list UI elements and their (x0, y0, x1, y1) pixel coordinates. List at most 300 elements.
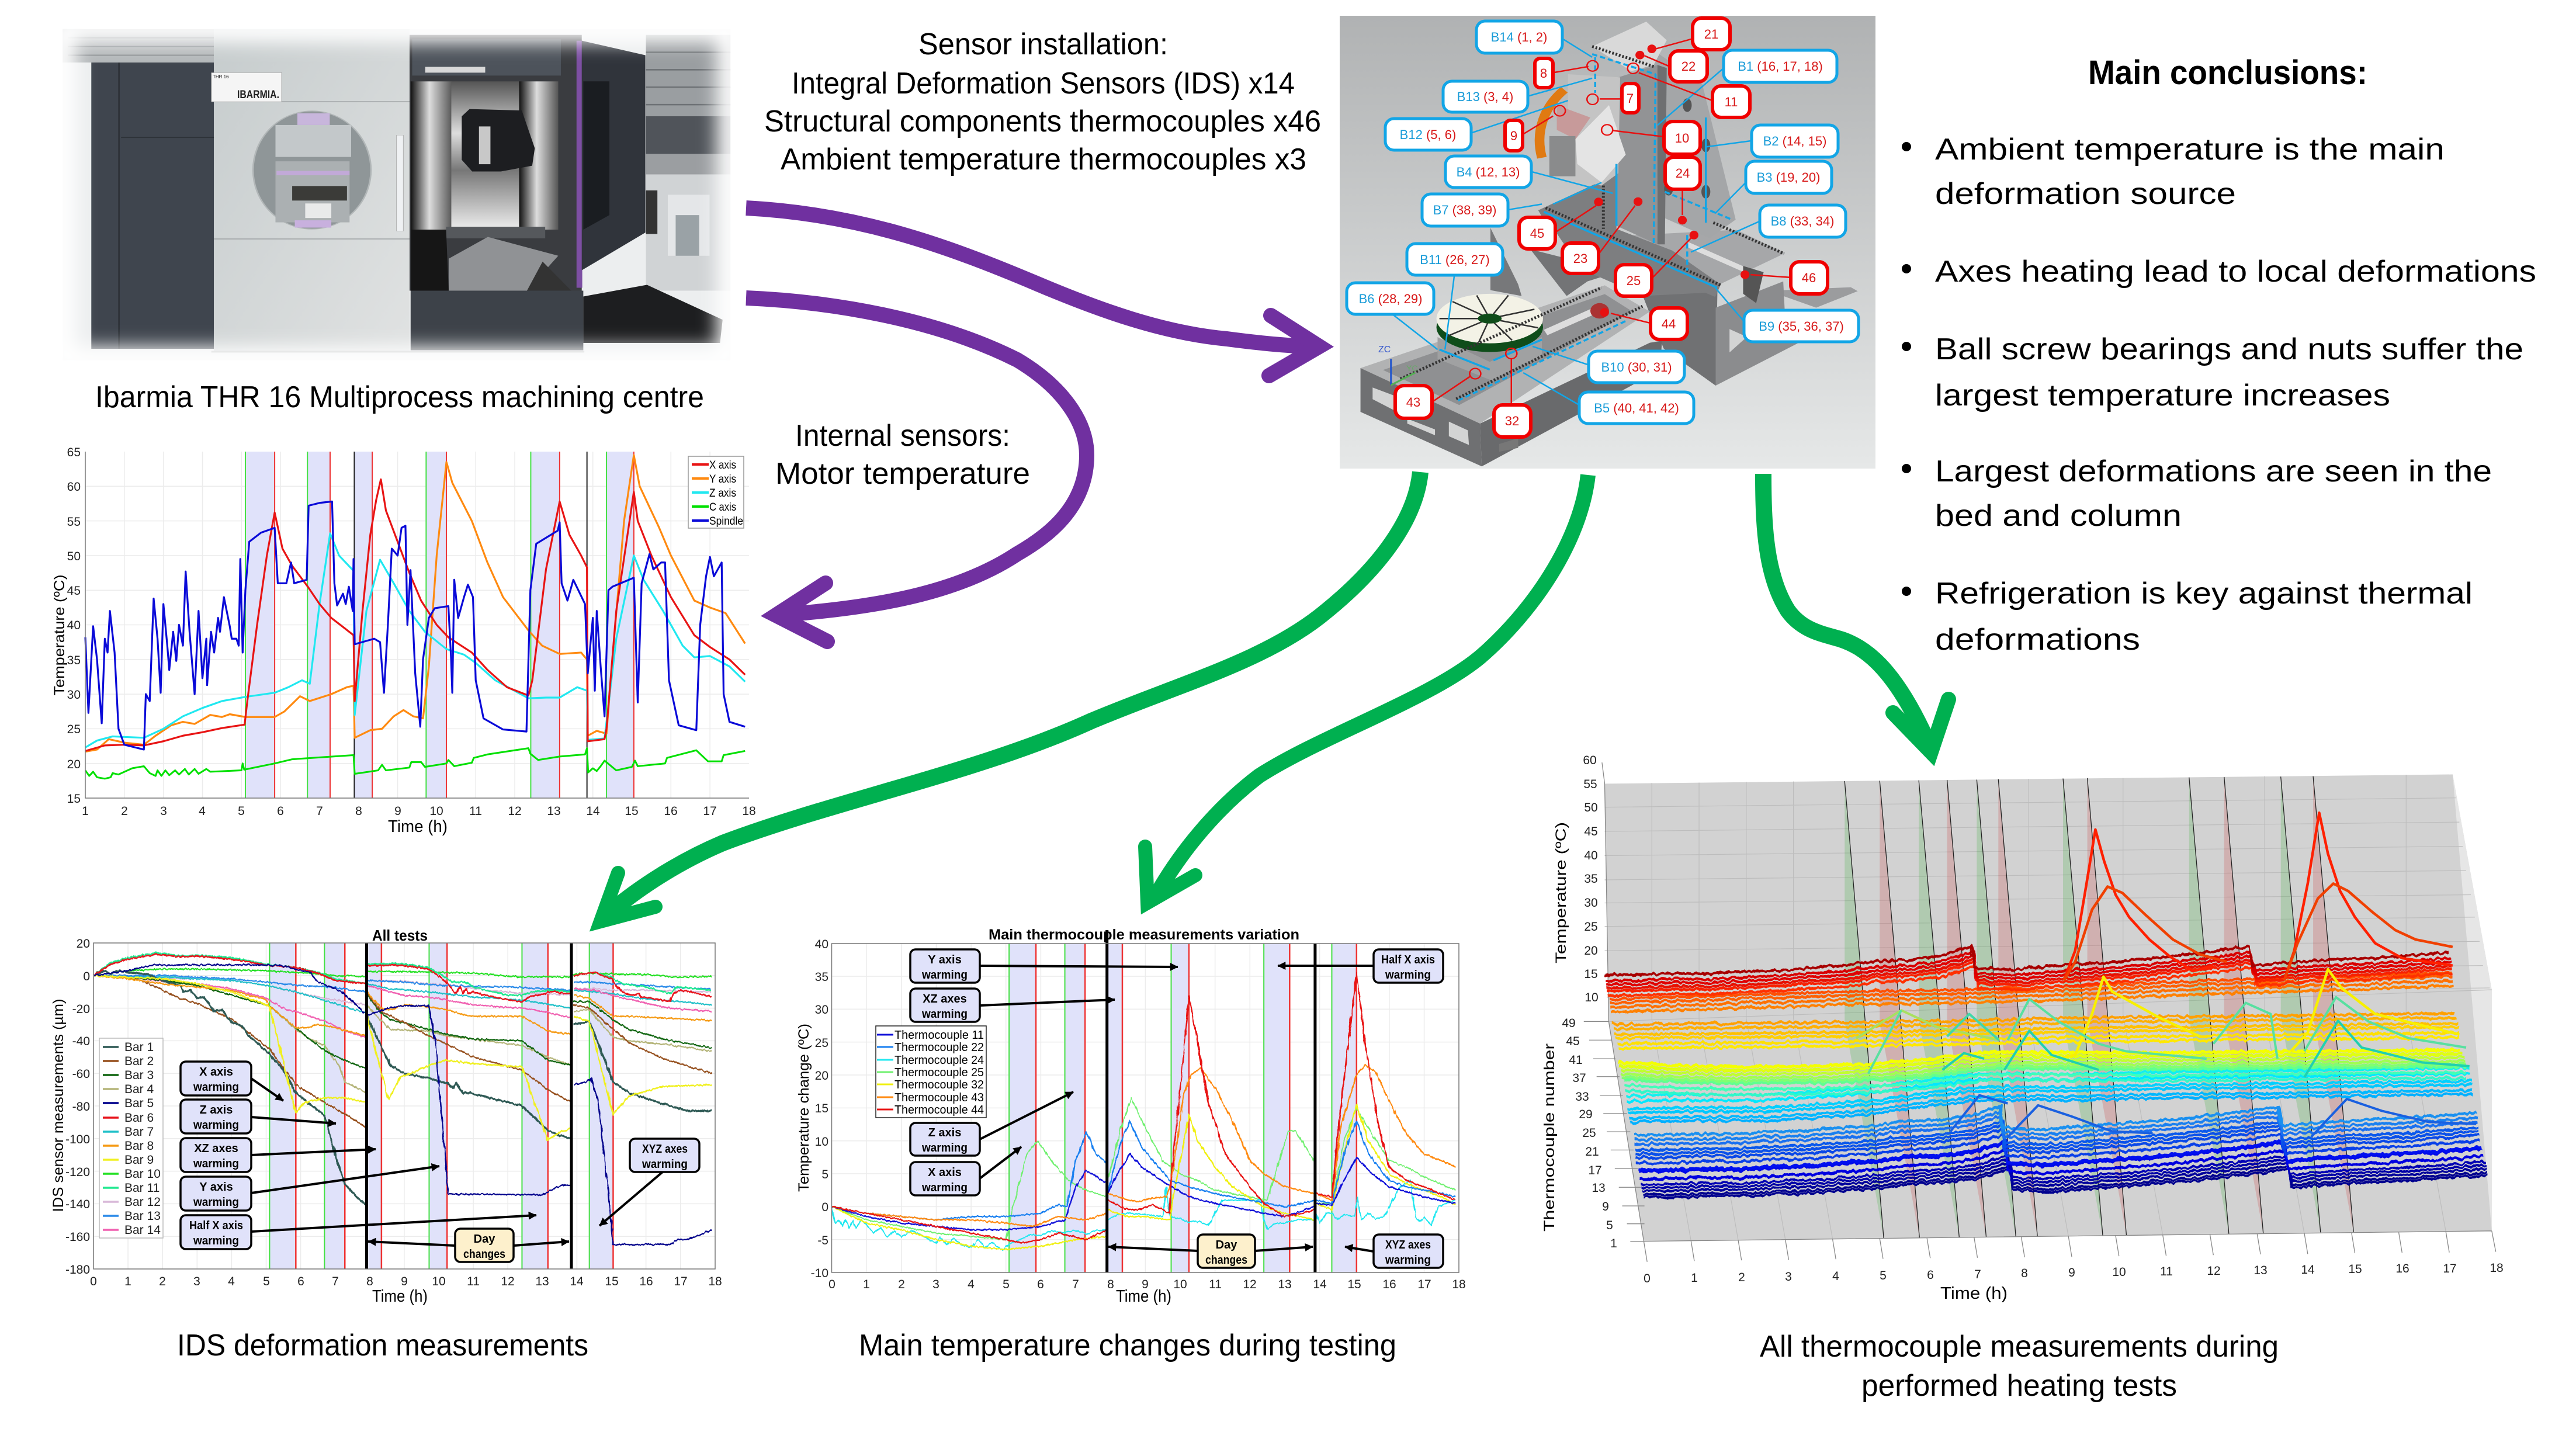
x axis ticks: 6 (297, 1275, 304, 1288)
IDS grid and heating bands (93, 943, 715, 1269)
legend (688, 456, 744, 528)
y axis ticks: 25 (67, 723, 81, 736)
temperature axis ticks: 45 (1584, 825, 1598, 838)
time axis ticks: 8 (2021, 1267, 2028, 1280)
machine brand plate text (213, 74, 279, 101)
text: internal sensors (775, 419, 1030, 491)
panel: machine sensor diagram (1340, 16, 1875, 469)
blue and red sensor labels: B2 (14, 15) (1763, 134, 1826, 148)
time axis ticks: 14 (2301, 1263, 2315, 1277)
legend: bars: Bar 6 (124, 1111, 154, 1125)
text: sensor installation (764, 27, 1321, 176)
blue and red sensor labels: 32 (1505, 414, 1519, 428)
time axis ticks: 12 (2207, 1264, 2221, 1278)
axis marks ZC YC (1378, 345, 1417, 373)
3D thermocouple traces (1605, 946, 2488, 1197)
x axis ticks: 13 (535, 1275, 549, 1288)
x axis ticks: 11 (467, 1275, 480, 1288)
thermocouple number ticks (1562, 1017, 1617, 1250)
x axis ticks: 14 (586, 805, 600, 818)
callout: XZ axes warming: XZ axes (194, 1142, 238, 1155)
chart: IDS deformation (50, 927, 722, 1306)
axis titles (796, 1024, 1171, 1306)
callout: XYZ axes warming: XYZ axes (642, 1143, 688, 1156)
thermocouple number ticks: 1 (1610, 1237, 1617, 1250)
x axis ticks: 5 (1003, 1278, 1010, 1291)
temperature axis ticks: 55 (1583, 778, 1597, 791)
callout: Y axis warming: Y axis (928, 953, 962, 966)
callout: XZ axes warming: warming (921, 1008, 968, 1021)
3D heating peaks (1856, 813, 2476, 1137)
caption: 3D thermocouple chart: performed heating tests (1861, 1369, 2177, 1403)
callout: X axis warming (181, 1062, 283, 1101)
x axis ticks: 15 (625, 805, 639, 818)
callout: Y axis warming: Y axis (199, 1181, 233, 1194)
blue and red sensor labels: 45 (1530, 226, 1544, 241)
blue and red sensor labels (1347, 18, 1859, 437)
text: sensor installation: Ambient temperature thermocouples x3 (781, 143, 1306, 176)
y axis ticks: 35 (67, 654, 81, 667)
time axis ticks: 1 (1691, 1271, 1698, 1285)
callout: day changes: Day (474, 1233, 495, 1246)
x axis ticks: 15 (1347, 1278, 1361, 1291)
legend: thermocouples: Thermocouple 43 (895, 1091, 984, 1104)
time axis ticks: 16 (2395, 1262, 2409, 1275)
legend: bars: Bar 14 (124, 1223, 161, 1237)
legend: thermocouples (876, 1026, 986, 1118)
x axis ticks: 0 (90, 1275, 97, 1288)
caption: IDS chart: IDS deformation measurements (177, 1329, 588, 1362)
time axis ticks: 6 (1927, 1268, 1934, 1282)
y axis ticks: 0 (83, 970, 90, 983)
panel: main conclusions (1902, 54, 2536, 657)
y axis ticks: 35 (815, 970, 828, 984)
conclusion bullets: Refrigeration is key against thermal (1935, 577, 2473, 611)
callout: Half X axis warming (181, 1215, 536, 1249)
x axis ticks: 2 (121, 805, 128, 818)
x axis ticks: 16 (664, 805, 678, 818)
callout: XYZ axes warming: XYZ axes (1385, 1239, 1431, 1251)
legend: Y axis (709, 473, 736, 486)
blue and red sensor labels: B5 (40, 41, 42) (1594, 401, 1679, 415)
3D walls and heating test planes (1584, 762, 2496, 1262)
legend: thermocouples: Thermocouple 44 (895, 1104, 984, 1116)
legend: Z axis (709, 487, 736, 500)
x axis ticks: 16 (1382, 1278, 1396, 1291)
thermocouple number ticks: 45 (1566, 1035, 1580, 1048)
x axis ticks: 12 (501, 1275, 515, 1288)
chart: 3D all thermocouples (1541, 754, 2504, 1303)
axis titles (50, 999, 428, 1306)
x axis ticks: 5 (238, 805, 245, 818)
arrow: photo to motor temperature chart (746, 298, 1087, 641)
x axis ticks: 18 (708, 1275, 722, 1288)
day change lines (367, 943, 571, 1269)
y axis ticks: -160 (65, 1230, 90, 1244)
y axis ticks: -120 (65, 1166, 90, 1179)
blue and red sensor labels: 25 (1627, 273, 1641, 288)
conclusion bullets (1902, 133, 2536, 657)
time axis ticks: 9 (2068, 1266, 2075, 1279)
x axis ticks: 1 (863, 1278, 870, 1291)
y axis ticks: 60 (67, 480, 81, 494)
conclusion bullets: Axes heating lead to local deformations (1935, 255, 2536, 289)
IDS bar curves (93, 953, 712, 1244)
caption: main temperature chart: Main temperature changes during testing (859, 1329, 1396, 1362)
y axis ticks: -5 (817, 1234, 828, 1247)
axis titles: Time (h) (1116, 1287, 1171, 1306)
callout: X axis warming: X axis (199, 1066, 233, 1079)
x axis ticks: 10 (1173, 1278, 1187, 1291)
y axis ticks: 45 (67, 584, 81, 598)
legend: bars: Bar 9 (124, 1153, 154, 1167)
text: sensor installation: Sensor installation: (918, 27, 1168, 61)
x axis ticks: 9 (1142, 1278, 1149, 1291)
conclusion bullets: Ambient temperature is the main (1935, 133, 2445, 167)
axis marks ZC YC: ZC (1378, 345, 1391, 355)
callout: Half X axis warming: warming (193, 1235, 239, 1247)
blue and red sensor labels: B10 (30, 31) (1601, 360, 1672, 374)
callout: Z axis warming: warming (921, 1142, 968, 1154)
time axis ticks: 3 (1785, 1270, 1792, 1284)
conclusion bullets: deformations (1935, 623, 2140, 657)
x axis ticks: 3 (193, 1275, 200, 1288)
thermocouple number ticks: 13 (1592, 1181, 1606, 1195)
text: internal sensors: Internal sensors: (795, 419, 1010, 453)
callout: XZ axes warming: XZ axes (923, 993, 967, 1005)
blue and red sensor labels: B6 (28, 29) (1359, 292, 1422, 306)
legend: thermocouples: Thermocouple 24 (895, 1054, 984, 1067)
axis titles: Time (h) (372, 1287, 428, 1306)
axis marks ZC YC: YC (1406, 363, 1417, 373)
chart plot area and curves (85, 452, 749, 798)
blue and red sensor labels: 23 (1573, 251, 1587, 266)
temperature axis ticks: 30 (1584, 896, 1598, 910)
machine column, head and table illustration (1391, 22, 1784, 399)
callout: XYZ axes warming (1345, 1235, 1443, 1268)
legend: bars: Bar 10 (124, 1167, 161, 1181)
x axis ticks: 2 (898, 1278, 905, 1291)
y axis ticks: -20 (72, 1003, 90, 1016)
temperature axis ticks: 15 (1584, 968, 1598, 981)
x axis ticks: 17 (1417, 1278, 1431, 1291)
blue and red sensor labels: 21 (1704, 27, 1718, 41)
legend: thermocouples: Thermocouple 32 (895, 1079, 984, 1091)
callout: day changes: changes (1205, 1254, 1247, 1267)
chart title: main thermocouple variation: Main thermocouple measurements variation (989, 927, 1299, 943)
callout: Y axis warming: warming (921, 969, 968, 982)
thermocouple grid and heating bands (832, 944, 1459, 1272)
x axis ticks: 8 (355, 805, 362, 818)
x axis ticks: 8 (366, 1275, 373, 1288)
legend: bars: Bar 4 (124, 1083, 154, 1096)
legend: Spindle (709, 515, 743, 528)
legend: bars: Bar 12 (124, 1195, 161, 1209)
callout: XYZ axes warming: warming (642, 1158, 688, 1171)
thermocouple number ticks: 41 (1569, 1053, 1583, 1067)
x axis ticks: 12 (508, 805, 522, 818)
legend: thermocouples: Thermocouple 11 (895, 1029, 984, 1042)
time axis ticks: 4 (1832, 1270, 1839, 1283)
time axis ticks: 13 (2253, 1264, 2268, 1277)
legend: bars: Bar 7 (124, 1125, 154, 1139)
temperature axis ticks: 25 (1584, 920, 1598, 934)
y axis ticks: 15 (815, 1102, 828, 1115)
callout: X axis warming: warming (193, 1081, 239, 1094)
axis titles: Temperature (ºC) (1553, 822, 1569, 963)
x axis ticks: 14 (570, 1275, 584, 1288)
legend: bars: Bar 1 (124, 1041, 154, 1054)
temperature axis ticks: 35 (1584, 872, 1598, 886)
axis titles: IDS sensor measurements (µm) (50, 999, 67, 1212)
day change lines (1107, 930, 1315, 1272)
callout: Z axis warming: warming (193, 1119, 239, 1132)
callout: Half X axis warming: warming (1385, 969, 1431, 982)
x axis ticks: 14 (1313, 1278, 1327, 1291)
callout: Y axis warming (910, 949, 1178, 983)
y axis ticks: 65 (67, 446, 81, 459)
y axis ticks: 30 (815, 1003, 828, 1017)
y axis ticks: 40 (67, 619, 81, 632)
callout: day changes (368, 1229, 569, 1262)
y axis ticks: 5 (821, 1168, 828, 1181)
x axis ticks: 11 (469, 805, 482, 818)
legend: thermocouples: Thermocouple 25 (895, 1066, 984, 1079)
y axis ticks: 55 (67, 515, 81, 529)
blue and red sensor labels: 24 (1676, 166, 1690, 181)
y axis ticks: 15 (67, 792, 81, 806)
caption: machine photo: Ibarmia THR 16 Multiprocess machining centre (95, 380, 704, 414)
time axis ticks: 11 (2160, 1265, 2173, 1278)
blue and red sensor labels: B14 (1, 2) (1491, 30, 1547, 44)
y axis ticks: -40 (72, 1035, 90, 1048)
thermocouple number ticks: 9 (1602, 1200, 1609, 1213)
blue and red sensor labels: 46 (1802, 271, 1816, 285)
x axis ticks: 4 (228, 1275, 235, 1288)
legend: bars: Bar 3 (124, 1069, 154, 1082)
arrow: sensor diagram to 3D chart (1763, 474, 1949, 752)
time axis ticks: 18 (2490, 1261, 2504, 1275)
callout: XZ axes warming (181, 1138, 376, 1172)
conclusion bullets: bed and column (1935, 499, 2182, 533)
x axis ticks: 10 (429, 805, 443, 818)
x axis ticks: 12 (1243, 1278, 1257, 1291)
text: sensor installation: Integral Deformation Sensors (IDS) x14 (792, 67, 1295, 100)
blue and red sensor labels: B8 (33, 34) (1771, 214, 1834, 228)
y axis ticks: 20 (77, 937, 90, 951)
callout: Y axis warming: warming (193, 1196, 239, 1209)
y axis ticks: -60 (72, 1067, 90, 1081)
blue and red sensor labels: B3 (19, 20) (1757, 170, 1820, 185)
legend: bars: Bar 11 (124, 1181, 160, 1195)
conclusion bullets: deformation source (1935, 177, 2236, 211)
callout: day changes: changes (463, 1248, 505, 1261)
blue and red sensor labels: B9 (35, 36, 37) (1759, 319, 1844, 334)
axis titles: Time (h) (1940, 1284, 2008, 1303)
x axis ticks: 13 (1278, 1278, 1292, 1291)
blue and red sensor labels: B12 (5, 6) (1400, 127, 1456, 142)
y axis ticks: -100 (65, 1133, 90, 1146)
y axis ticks: 50 (67, 550, 81, 563)
blue and red sensor labels: 11 (1725, 95, 1738, 109)
x axis ticks: 6 (1037, 1278, 1044, 1291)
y axis ticks: 30 (67, 688, 81, 702)
x axis ticks: 0 (828, 1278, 835, 1291)
callout: day changes: Day (1216, 1239, 1237, 1251)
thermocouple number ticks: 25 (1582, 1126, 1596, 1140)
axis titles (51, 575, 448, 836)
machine brand plate text: IBARMIA. (237, 89, 279, 101)
blue and red sensor labels: 9 (1510, 129, 1517, 143)
text: sensor installation: Structural components thermocouples x46 (764, 105, 1321, 138)
axis titles: Time (h) (388, 817, 448, 836)
conclusion bullets: Ball screw bearings and nuts suffer the (1935, 332, 2523, 366)
chart: main thermocouple changes (796, 927, 1466, 1306)
time axis ticks: 15 (2348, 1263, 2362, 1276)
blue and red sensor labels: 44 (1662, 317, 1676, 331)
temperature axis ticks (1583, 754, 1599, 1004)
caption: 3D thermocouple chart: All thermocouple measurements during (1760, 1330, 2279, 1364)
legend: bars: Bar 5 (124, 1097, 154, 1110)
callout: XYZ axes warming (599, 1139, 699, 1226)
x axis ticks: 7 (1072, 1278, 1079, 1291)
text: internal sensors: Motor temperature (775, 457, 1030, 491)
x axis ticks: 9 (401, 1275, 408, 1288)
chart title: all tests: All tests (372, 927, 428, 944)
x axis ticks: 1 (124, 1275, 131, 1288)
x axis ticks: 1 (82, 805, 89, 818)
arrow: sensor diagram to IDS chart (601, 472, 1420, 921)
y axis ticks: 25 (815, 1036, 828, 1050)
x axis ticks (90, 1275, 722, 1288)
photo: Ibarmia THR 16 machining centre (63, 29, 730, 360)
callout: Z axis warming (910, 1092, 1073, 1156)
callout: Z axis warming: Z axis (200, 1104, 233, 1116)
thermocouple number ticks: 49 (1562, 1017, 1576, 1030)
x axis ticks: 10 (432, 1275, 446, 1288)
y axis ticks: 0 (821, 1201, 828, 1214)
legend: C axis (709, 501, 736, 514)
callout: Y axis warming (181, 1166, 439, 1211)
x axis ticks: 3 (160, 805, 167, 818)
arrow: sensor diagram to temperature chart (1145, 475, 1588, 903)
blue sensor lines and leaders (1393, 39, 1760, 405)
y axis ticks: 10 (815, 1135, 828, 1149)
y axis ticks: -140 (65, 1198, 90, 1211)
legend: bars (99, 1038, 163, 1238)
blue and red sensor labels: B13 (3, 4) (1457, 89, 1513, 104)
time axis ticks: 17 (2443, 1262, 2457, 1275)
y axis ticks (811, 938, 828, 1280)
conclusion bullets: Largest deformations are seen in the (1935, 455, 2492, 488)
thermocouple number ticks: 17 (1588, 1164, 1602, 1177)
arrow: photo to sensor diagram (746, 208, 1319, 376)
callout: XZ axes warming: warming (193, 1157, 239, 1170)
x axis ticks: 4 (199, 805, 206, 818)
x axis ticks: 6 (277, 805, 284, 818)
blue and red sensor labels: B7 (38, 39) (1433, 203, 1496, 217)
x axis ticks: 17 (674, 1275, 688, 1288)
x axis ticks: 7 (332, 1275, 339, 1288)
callout: X axis warming: X axis (928, 1166, 962, 1179)
blue and red sensor labels: 22 (1681, 59, 1696, 74)
callout: Half X axis warming: Half X axis (1381, 953, 1435, 966)
callout: Z axis warming: Z axis (928, 1126, 961, 1139)
photo edge fade (63, 29, 730, 360)
temperature axis ticks: 50 (1584, 801, 1598, 814)
legend: thermocouples: Thermocouple 22 (895, 1041, 984, 1054)
x axis ticks: 13 (547, 805, 561, 818)
callout: day changes (1108, 1235, 1313, 1268)
axis titles (1541, 822, 2008, 1303)
thermocouple curves (832, 973, 1455, 1250)
conclusion bullets: largest temperature increases (1935, 379, 2390, 412)
x axis ticks (828, 1278, 1466, 1291)
y axis ticks: 20 (815, 1069, 828, 1083)
x axis ticks: 11 (1209, 1278, 1222, 1291)
caption: 3D thermocouple chart (1760, 1330, 2279, 1403)
time axis ticks: 2 (1738, 1271, 1745, 1284)
y axis ticks: -80 (72, 1100, 90, 1114)
y axis ticks: 20 (67, 758, 81, 771)
thermocouple number ticks: 29 (1579, 1108, 1593, 1121)
x axis ticks: 17 (703, 805, 717, 818)
x axis ticks: 7 (316, 805, 323, 818)
legend: X axis (709, 459, 736, 471)
callout: XYZ axes warming: warming (1385, 1254, 1431, 1267)
y axis ticks: -10 (811, 1267, 828, 1280)
blue and red sensor labels: 10 (1675, 131, 1689, 145)
callout: X axis warming (910, 1147, 1021, 1195)
blue and red sensor labels: B4 (12, 13) (1457, 165, 1520, 179)
time axis ticks: 5 (1880, 1269, 1887, 1282)
x axis ticks: 2 (159, 1275, 166, 1288)
temperature axis ticks: 40 (1584, 849, 1598, 862)
callout: XZ axes warming (910, 989, 1115, 1022)
axis titles: Thermocouple number (1541, 1043, 1558, 1232)
thermocouple number ticks: 5 (1606, 1219, 1613, 1232)
heading: main conclusions: Main conclusions: (2088, 54, 2367, 92)
x axis ticks (82, 805, 756, 818)
axis titles: Temperature (ºC) (51, 575, 68, 695)
callout: Half X axis warming: Half X axis (189, 1219, 243, 1232)
legend: bars: Bar 13 (124, 1209, 161, 1223)
thermocouple number ticks: 21 (1585, 1145, 1599, 1159)
chart: motor temperature (51, 446, 756, 836)
callout: X axis warming: warming (921, 1181, 968, 1194)
y axis ticks (67, 446, 81, 806)
time axis ticks (1644, 1261, 2504, 1285)
machine brand plate text: THR 16 (213, 74, 229, 79)
y axis ticks: 40 (815, 938, 828, 951)
time axis ticks: 7 (1974, 1268, 1981, 1281)
y axis ticks: -180 (65, 1263, 90, 1277)
x axis ticks: 18 (1452, 1278, 1466, 1291)
callout: Half X axis warming (1278, 949, 1443, 983)
callout: Z axis warming (181, 1100, 336, 1133)
temperature axis ticks: 20 (1584, 944, 1598, 958)
x axis ticks: 15 (605, 1275, 619, 1288)
thermocouple number ticks: 37 (1572, 1072, 1586, 1085)
x axis ticks: 4 (968, 1278, 975, 1291)
blue and red sensor labels: 8 (1540, 66, 1547, 81)
legend: bars: Bar 2 (124, 1055, 154, 1068)
x axis ticks: 16 (639, 1275, 653, 1288)
temperature axis ticks: 60 (1583, 754, 1597, 767)
blue and red sensor labels: 43 (1406, 395, 1420, 410)
machine bed illustration (1361, 209, 1858, 466)
x axis ticks: 18 (742, 805, 756, 818)
